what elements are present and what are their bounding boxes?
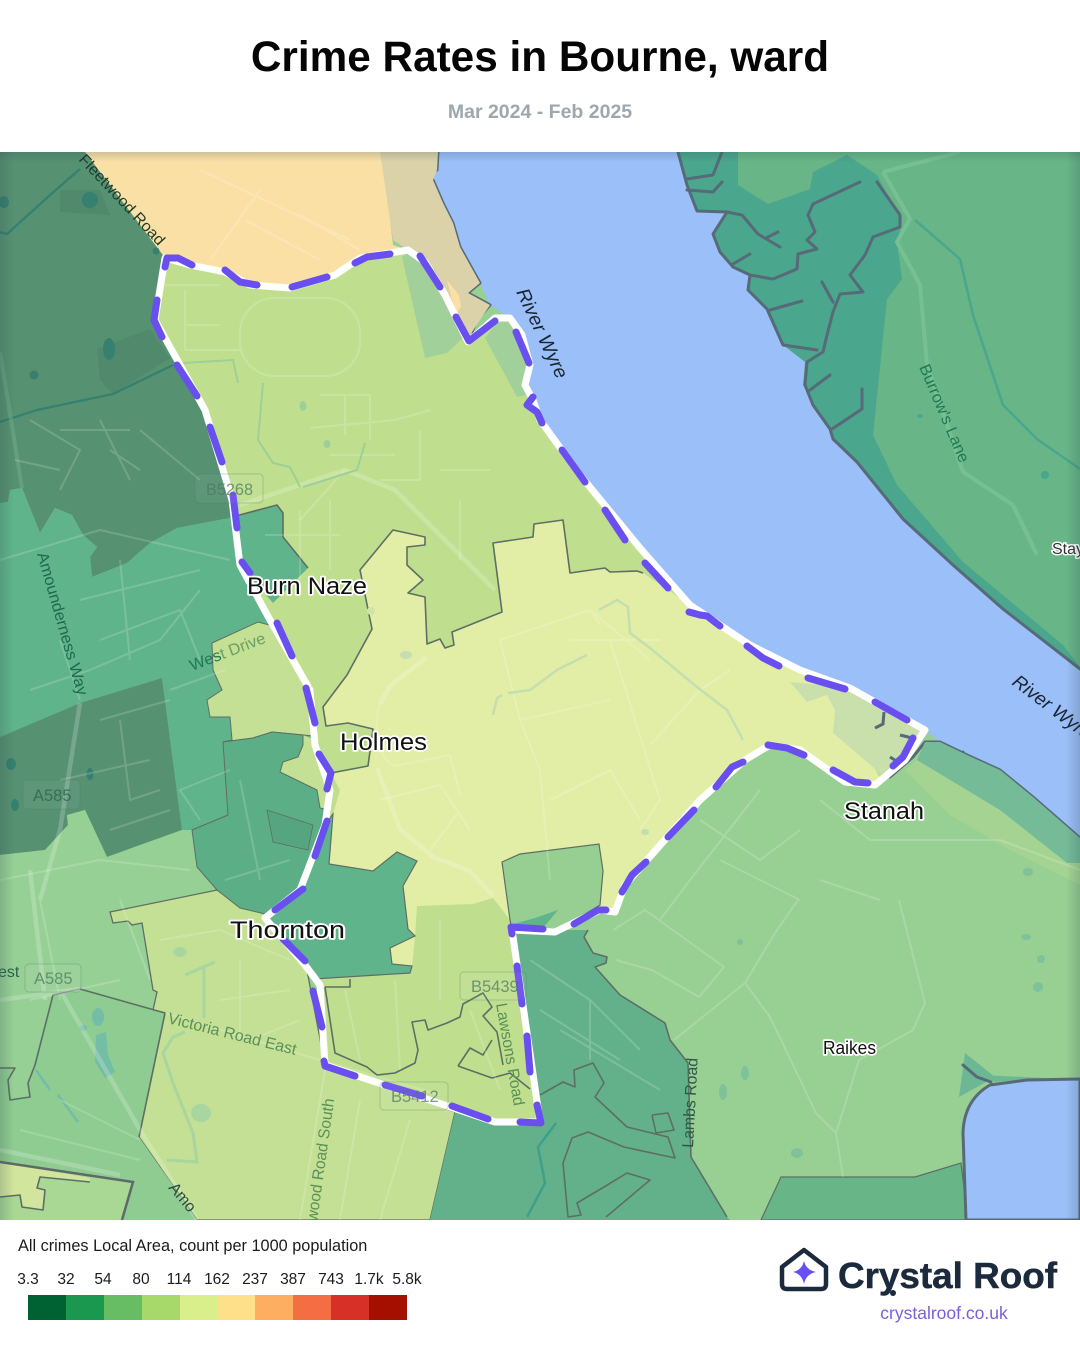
place labels: Burn Naze	[247, 573, 367, 600]
place labels: Thornton	[230, 917, 345, 944]
legend scale labels: 237	[242, 1271, 268, 1288]
road and water labels: Amounderness Way	[33, 550, 90, 697]
small parcel inside medium zone	[267, 810, 313, 850]
road and water labels: Amo	[165, 1180, 199, 1216]
wordmark: Crystal Roof	[838, 1255, 1058, 1296]
water features in Victoria zone	[163, 947, 215, 1162]
legend scale labels: 1.7k	[354, 1271, 384, 1288]
dark green zone north-west	[0, 152, 235, 577]
road number tags: B5439	[471, 978, 519, 996]
road and water labels: Fleetwood Road	[75, 152, 168, 249]
lower central zone	[430, 930, 730, 1220]
ward boundary: white outline	[155, 250, 925, 1122]
east bank land, upper right	[678, 152, 1080, 672]
road number tags	[23, 474, 526, 1110]
place labels: Raikes	[823, 1038, 876, 1058]
legend scale labels: 80	[132, 1271, 150, 1288]
lower right green block	[761, 1163, 968, 1220]
legend scale labels: 32	[57, 1271, 75, 1288]
road and water labels: River Wyre	[511, 285, 571, 382]
lake south-east	[963, 1079, 1080, 1220]
light nub beside Thornton zone	[280, 735, 330, 810]
Victoria Road zone	[110, 890, 455, 1220]
medium green pocket inside ward, north	[230, 505, 308, 603]
road and water labels: Lambs Road	[680, 1057, 702, 1148]
place labels: Stanah	[844, 798, 924, 825]
lake creek	[963, 1065, 991, 1082]
legend colour ramp	[28, 1295, 407, 1320]
Thornton medium green block	[265, 814, 417, 979]
map edge shading	[0, 152, 1080, 1220]
road and water labels: wood Road South	[304, 1097, 338, 1220]
icon: house with star	[782, 1250, 826, 1289]
medium green zone west	[0, 488, 335, 918]
orange zone north of ward	[85, 152, 408, 288]
bottom-left block	[0, 1162, 133, 1220]
subtitle: date range: Mar 2024 - Feb 2025	[448, 101, 632, 123]
south ward inner boundaries	[325, 979, 530, 1089]
small teal wedge near lake	[959, 1053, 1045, 1097]
faint roads	[0, 170, 1080, 1220]
south-east riverbank strip	[917, 742, 1080, 863]
foreshore creeks	[875, 712, 912, 762]
watercourses in ward	[183, 360, 743, 835]
river banks and marsh creeks	[410, 152, 1080, 838]
choropleth map	[0, 152, 1080, 1220]
ward boundary: violet dashes	[154, 254, 913, 1123]
tan shoreline zone	[380, 152, 490, 342]
south-east pocket	[502, 844, 603, 932]
map base land	[0, 152, 1080, 1220]
legend title: All crimes Local Area, count per 1000 population	[18, 1237, 367, 1255]
darker patches, creek and ponds in north-west zone	[0, 169, 173, 488]
ponds east	[719, 868, 1045, 1158]
logo: Crystal Roof	[780, 1248, 1058, 1296]
legend scale labels: 387	[280, 1271, 306, 1288]
place labels: Holmes	[340, 729, 427, 756]
river	[433, 152, 1080, 838]
road number tags: A585	[34, 970, 73, 988]
road and water labels: Lawsons Road	[492, 1002, 527, 1107]
grey-green foreshore patch	[790, 682, 925, 775]
ponds in dark block	[6, 758, 94, 811]
road and water labels: Burrow's Lane	[915, 362, 972, 465]
title: Crime Rates in Bourne, ward	[251, 33, 829, 80]
park block south-west	[0, 989, 197, 1220]
pale central zone	[323, 520, 882, 936]
pale zone boundary lines	[323, 520, 643, 773]
road and water labels: Victoria Road East	[166, 1010, 299, 1059]
small pale nub	[390, 936, 415, 966]
website link: crystalroof.co.uk	[880, 1303, 1008, 1323]
legend scale labels	[17, 1271, 422, 1288]
park patches in north ward	[402, 250, 529, 397]
ward base fill	[155, 250, 925, 1122]
road number tags: B5268	[206, 481, 253, 499]
road and water labels: West Drive	[187, 630, 268, 675]
road and water labels	[0, 151, 1080, 1224]
legend scale labels: 54	[94, 1271, 112, 1288]
Medium zone beside Thornton	[192, 732, 328, 914]
legend scale labels: 3.3	[17, 1271, 39, 1288]
road number tags: A585	[33, 787, 72, 805]
legend scale labels: 162	[204, 1271, 230, 1288]
legend scale labels: 114	[167, 1271, 191, 1288]
ponds in park block	[36, 1008, 115, 1122]
road number tags: B5412	[391, 1088, 439, 1106]
legend scale labels: 743	[318, 1271, 344, 1288]
dark block beside A585	[0, 678, 182, 857]
Stanah lighter shore band	[905, 760, 1080, 885]
West Drive light zone	[207, 622, 315, 742]
south-west light green zone	[0, 810, 455, 1220]
legend scale labels: 5.8k	[392, 1271, 422, 1288]
place labels	[230, 573, 924, 1058]
